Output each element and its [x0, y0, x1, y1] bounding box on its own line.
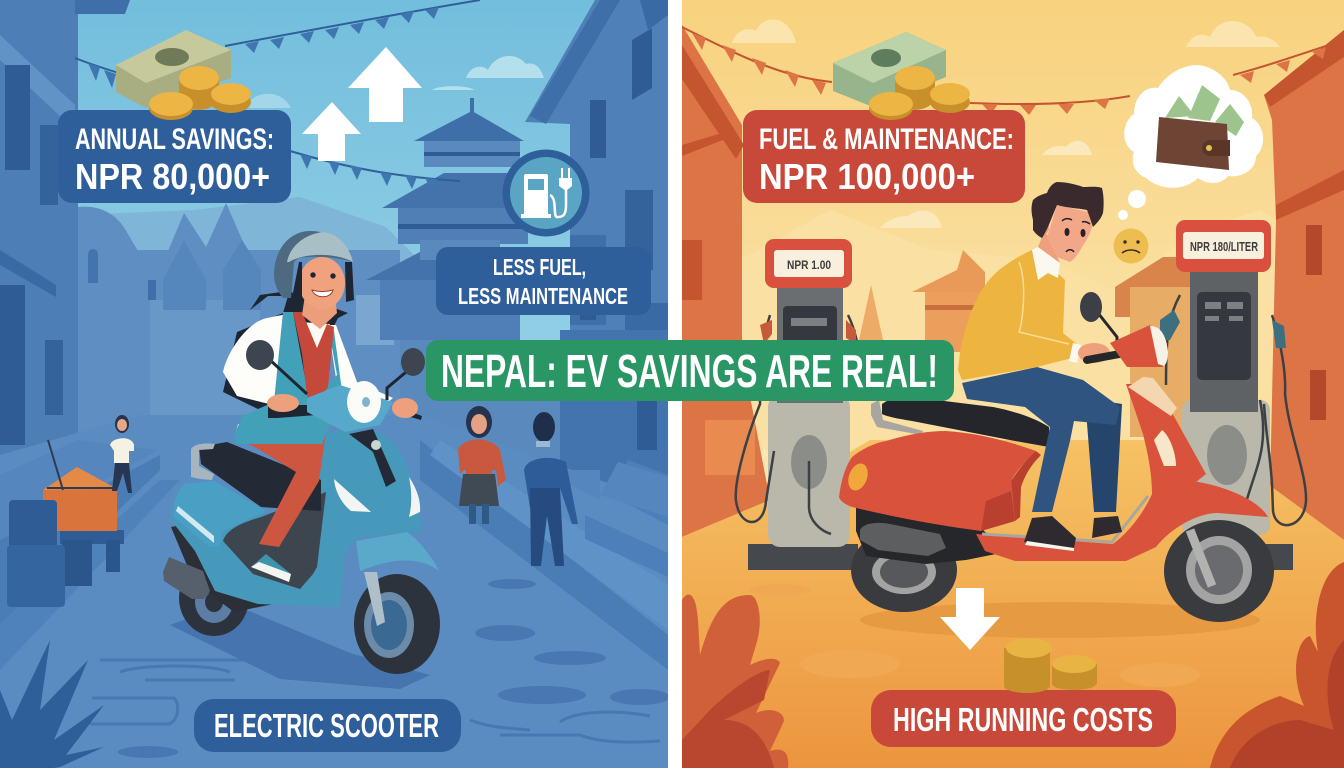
hair	[1032, 182, 1104, 238]
clouds and mountains	[110, 56, 544, 262]
vest	[234, 312, 342, 444]
rider with sweater	[958, 182, 1168, 551]
sky	[78, 0, 595, 340]
right buildings	[1264, 30, 1344, 540]
fuel pump: left	[736, 239, 862, 570]
card: fuel and maintenance	[743, 110, 1025, 203]
backpack and hair	[223, 291, 348, 418]
sweater	[958, 250, 1078, 380]
icon: coin stacks	[1004, 638, 1097, 693]
petrol scooter	[839, 377, 1274, 622]
thought bubble with wallet	[1118, 65, 1263, 220]
mirror	[1098, 313, 1117, 345]
title banner: NEPAL: EV SAVINGS ARE REAL!	[441, 345, 938, 397]
front wheel	[1164, 520, 1274, 622]
foliage: right	[1210, 562, 1344, 768]
electric scooter	[163, 429, 440, 674]
bunting: left	[75, 0, 480, 191]
headlight	[307, 385, 393, 432]
grab rail	[871, 400, 923, 435]
card: annual savings	[58, 110, 291, 203]
label: electric scooter: ELECTRIC SCOOTER	[214, 707, 439, 744]
cuff and hand	[1069, 343, 1081, 363]
shoes	[1024, 516, 1076, 548]
card: less fuel, less maintenance: LESS FUEL,	[493, 254, 586, 280]
panel: electric scooter scene	[0, 0, 670, 768]
sky	[682, 0, 1344, 768]
face	[1047, 205, 1092, 262]
bystander: woman in white	[110, 415, 134, 493]
left buildings	[0, 0, 400, 490]
card: less fuel, less maintenance	[436, 247, 651, 315]
street and pavement	[0, 415, 670, 768]
card: annual savings: ANNUAL SAVINGS:	[75, 123, 274, 156]
icon: sad face	[1114, 228, 1148, 264]
left buildings	[682, 25, 770, 537]
leg shield panel	[349, 429, 396, 487]
card: fuel and maintenance: FUEL & MAINTENANCE:	[759, 123, 1014, 156]
floor panel	[223, 492, 326, 589]
icon: money stack with coins	[116, 30, 251, 120]
rear body	[839, 431, 1036, 531]
bystander: man in blue	[524, 412, 578, 566]
mirrors	[270, 360, 412, 400]
fender	[356, 532, 439, 571]
helmet	[274, 231, 353, 298]
card: fuel and maintenance: NPR 100,000+	[759, 156, 975, 197]
rider	[223, 231, 425, 582]
seat	[882, 397, 1049, 447]
arrow: large up	[348, 47, 422, 122]
engine	[171, 526, 272, 610]
label: high running costs	[871, 690, 1176, 747]
scooter shadow	[170, 603, 430, 689]
fuel pump: right: NPR 180/LITER	[1190, 240, 1258, 254]
shoe	[251, 554, 291, 582]
icon: money stack with coins	[833, 32, 970, 120]
rear wheel	[179, 591, 248, 636]
trousers	[248, 435, 326, 547]
handlebar and hands	[268, 405, 422, 420]
right buildings	[525, 0, 668, 500]
rear body panel	[214, 481, 215, 482]
fuel pump: left: NPR 1.00	[787, 258, 831, 272]
rear wheel	[851, 528, 957, 612]
floor and shield	[976, 384, 1206, 561]
foliage	[0, 640, 104, 768]
engine	[856, 507, 1006, 564]
main body silhouette	[171, 431, 422, 607]
distant temple	[859, 250, 1190, 437]
seat	[199, 442, 321, 511]
handle	[1087, 353, 1125, 360]
collar	[1032, 247, 1060, 280]
grab rail	[191, 444, 215, 480]
front wheel	[354, 574, 440, 674]
street	[682, 440, 1344, 768]
icon: fuel pump with plug	[502, 150, 590, 236]
title banner	[426, 340, 954, 401]
label: high running costs: HIGH RUNNING COSTS	[893, 701, 1153, 738]
fuel pump: right	[1160, 220, 1306, 570]
pagoda temple	[366, 98, 570, 460]
white jacket	[223, 314, 283, 404]
neck	[1038, 230, 1060, 267]
bystander: woman in red	[458, 406, 506, 524]
bunting: right	[682, 27, 1344, 115]
white lower band	[236, 424, 239, 431]
orange crate and blocks	[7, 440, 124, 607]
panel: petrol scooter scene	[682, 0, 1344, 768]
arrow: down	[940, 588, 1000, 650]
neck and face	[302, 300, 337, 329]
jeans near leg	[962, 367, 1120, 512]
clouds and hills	[732, 19, 1344, 450]
scarf	[293, 312, 334, 404]
foliage: left	[682, 595, 788, 768]
fender	[1156, 481, 1268, 547]
jeans far leg	[1085, 398, 1122, 512]
label: electric scooter	[194, 699, 461, 752]
front headlamp	[1110, 325, 1167, 367]
shirt	[306, 322, 330, 348]
card: less fuel, less maintenance: LESS MAINTENANCE	[458, 283, 628, 309]
arrow: small up	[302, 102, 361, 161]
card: annual savings: NPR 80,000+	[75, 156, 270, 197]
